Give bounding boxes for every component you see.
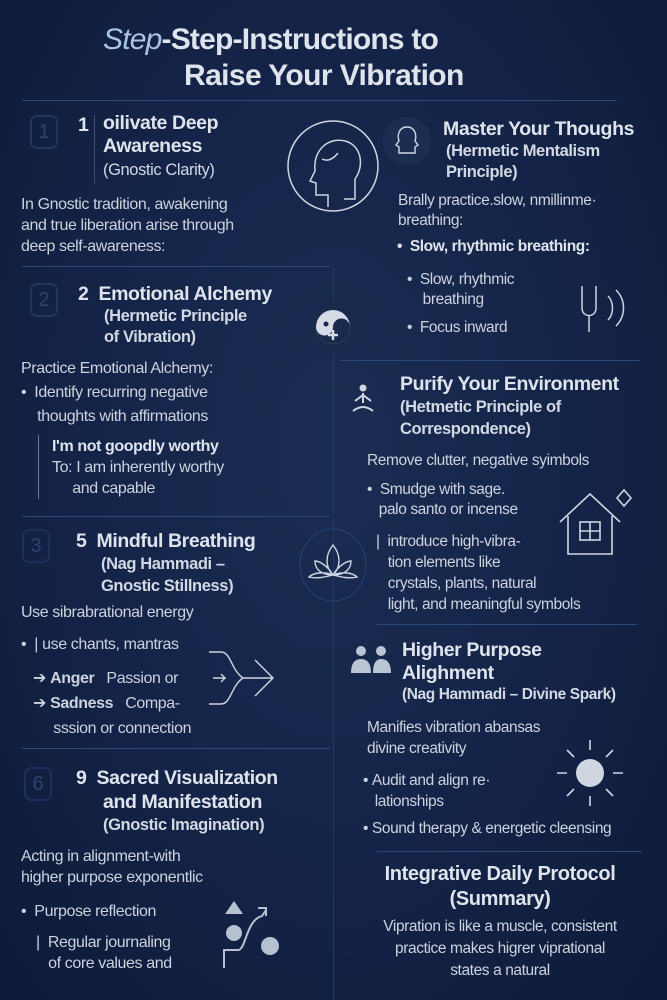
text: [398, 192, 596, 229]
panel: step 4: and Manifestation: [103, 791, 262, 813]
panel: higher purpose: (Nag Hammadi – Divine Spark): [402, 686, 616, 703]
panel: step 3: ➔ Sadness Compa-: [33, 695, 180, 712]
panel: step 3: [21, 529, 255, 737]
panel: purify environment: tion elements like: [388, 554, 500, 571]
badge 2: [30, 283, 58, 317]
badge 2: 2: [38, 289, 50, 311]
summary heading: [385, 863, 615, 910]
icon: meditation: [352, 384, 374, 412]
panel: higher purpose: lationships: [375, 793, 444, 810]
panel: step 4: of core values and: [48, 955, 172, 972]
panel: master your thoughts: • Slow, rhythmic breathing:: [397, 238, 590, 255]
step 1 text: and true liberation arise through: [21, 217, 234, 234]
panel: purify environment: Correspondence): [400, 420, 531, 438]
panel: step 4: [21, 767, 278, 972]
quote block: and capable: [72, 480, 155, 497]
panel: master your thoughts: • Slow, rhythmic: [407, 271, 514, 288]
text: Remove clutter, negative syimbols: [367, 452, 589, 469]
badge 1: [30, 115, 58, 149]
panel: summary: [383, 863, 618, 979]
step 4 text: higher purpose exponentlic: [21, 869, 203, 886]
summary text: [383, 918, 618, 979]
icon: lotus: [300, 528, 366, 602]
icon: converging arrows: [209, 651, 274, 705]
step 4 text: [21, 848, 203, 886]
icon: small head: [395, 118, 430, 154]
title: Raise Your Vibration: [184, 59, 464, 92]
icon: shapes path: [223, 901, 279, 968]
heading: Higher Purpose: [402, 639, 542, 661]
badge 1: 1: [38, 121, 50, 143]
panel: purify environment: palo santo or incense: [379, 501, 518, 518]
panel: step 1: [21, 112, 234, 255]
panel: step 4: (Gnostic Imagination): [103, 816, 264, 834]
panel: step 2: of Vibration): [104, 328, 196, 346]
step 1 text: In Gnostic tradition, awakening: [21, 196, 227, 213]
summary text: Vipration is like a muscle, consistent: [383, 918, 617, 935]
heading: Purify Your Environment: [400, 373, 619, 395]
summary heading: (Summary): [450, 888, 550, 910]
step 4 text: Acting in alignment-with: [21, 848, 180, 865]
step 1 text: [21, 196, 234, 255]
quote block: I'm not goopdly worthy: [52, 438, 219, 455]
panel: step 3: • | use chants, mantras: [21, 636, 179, 653]
panel: higher purpose: [351, 639, 616, 837]
icon: people: [351, 646, 391, 673]
panel: higher purpose: • Sound therapy & energetic cleensing: [363, 820, 611, 837]
summary text: practice makes higrer viprational: [395, 940, 605, 957]
panel: step 2: • Identify recurring negative: [21, 384, 208, 401]
icon: head circle: [287, 120, 379, 212]
panel: master your thoughts: (Hermetic Mentalism: [446, 142, 600, 160]
summary heading: Integrative Daily Protocol: [385, 863, 615, 885]
panel: master your thoughts: Principle): [446, 163, 517, 181]
step 4 heading: 9 Sacred Visualization: [76, 767, 278, 789]
panel: purify environment: (Hetmetic Principle of: [400, 398, 561, 416]
quote block: To: I am inherently worthy: [52, 459, 224, 476]
panel: step 3: sssion or connection: [53, 720, 191, 737]
panel: purify environment: • Smudge with sage.: [367, 481, 505, 498]
panel: step 3: (Nag Hammadi –: [101, 555, 225, 573]
icon: house: [560, 488, 632, 555]
panel: step 4: • Purpose reflection: [21, 903, 156, 920]
badge 3: 3: [30, 535, 42, 557]
heading: Alighment: [402, 662, 494, 684]
step 3 text: Use sibrabrational energy: [21, 604, 193, 621]
panel: step 1: Awareness: [103, 135, 202, 157]
badge 6: 6: [32, 773, 44, 795]
panel: step 3: ➔ Anger Passion or: [33, 670, 178, 687]
panel: master your thoughts: • Focus inward: [407, 319, 507, 336]
text: Manifies vibration abansas: [367, 719, 540, 736]
badge 3: [22, 529, 50, 563]
icon: sun: [557, 740, 623, 806]
title: [103, 23, 464, 92]
panel: purify environment: [352, 373, 619, 613]
icon: yin yang: [316, 301, 350, 353]
panel: higher purpose: • Audit and align re·: [363, 772, 490, 789]
quote block: [38, 435, 278, 499]
badge 6: [24, 767, 52, 801]
text: breathing:: [398, 212, 463, 229]
title: Step-Step-Instructions to: [103, 23, 438, 56]
icon: tuning fork: [581, 286, 624, 332]
panel: step 2: thoughts with affirmations: [37, 408, 208, 425]
step 3 heading: 5 Mindful Breathing: [76, 530, 255, 552]
step 2 heading: 2 Emotional Alchemy: [78, 283, 272, 305]
panel: purify environment: light, and meaningful symbols: [388, 596, 580, 613]
panel: step 4: | Regular journaling: [36, 934, 171, 951]
panel: master your thoughts: [395, 118, 634, 336]
panel: step 1: oilivate Deep: [103, 112, 218, 134]
text: divine creativity: [367, 740, 466, 757]
panel: step 1: (Gnostic Clarity): [103, 161, 214, 179]
text: Brally practice.slow, nmillinme·: [398, 192, 596, 209]
step 2 text: Practice Emotional Alchemy:: [21, 360, 213, 377]
panel: purify environment: | introduce high-vibra-: [376, 533, 520, 550]
summary text: states a natural: [450, 962, 550, 979]
step 1 heading: 1: [78, 114, 88, 136]
step 1 text: deep self-awareness:: [21, 238, 165, 255]
text: [367, 719, 540, 757]
heading: [402, 639, 542, 684]
panel: purify environment: crystals, plants, natural: [388, 575, 536, 592]
heading: Master Your Thoughs: [443, 118, 634, 140]
panel: master your thoughts: breathing: [423, 291, 484, 308]
panel: step 2: (Hermetic Principle: [104, 307, 247, 325]
panel: step 3: Gnostic Stillness): [101, 577, 233, 595]
panel: step 2: [21, 283, 272, 499]
